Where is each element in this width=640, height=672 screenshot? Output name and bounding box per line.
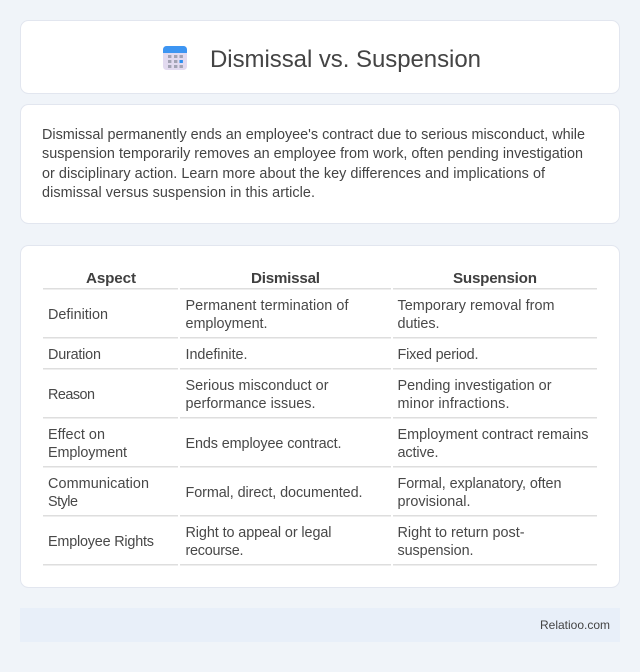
row: definition: Definition xyxy=(48,307,108,323)
table header xyxy=(86,270,537,287)
row: definition xyxy=(48,298,554,332)
row: reason: Reason xyxy=(48,387,95,403)
row: duration: Duration xyxy=(48,347,101,363)
intro paragraph xyxy=(42,127,585,201)
table header: Dismissal xyxy=(251,270,320,287)
row: employee rights: Right to appeal or legal xyxy=(186,525,332,541)
row: reason: minor infractions. xyxy=(398,396,510,412)
row: duration: Fixed period. xyxy=(398,347,478,363)
row: effect on employment: active. xyxy=(398,445,438,461)
row: employee rights: Employee Rights xyxy=(48,534,154,550)
intro paragraph: suspension temporarily removes an employee from work, often pending investigation xyxy=(42,146,583,162)
row: definition: duties. xyxy=(398,316,440,332)
row: communication style: Style xyxy=(48,494,78,510)
icon: calendar xyxy=(163,46,187,70)
row: employee rights: recourse. xyxy=(186,543,244,559)
title text: Dismissal vs. Suspension xyxy=(210,46,481,73)
row: employee rights xyxy=(48,525,525,559)
row: effect on employment: Employment contract remains xyxy=(398,427,588,443)
row: employee rights: Right to return post- xyxy=(398,525,525,541)
row: effect on employment xyxy=(48,427,588,461)
row: communication style: provisional. xyxy=(398,494,470,510)
panel: comparison table xyxy=(20,246,620,588)
row: effect on employment: Effect on xyxy=(48,427,105,443)
table header: Suspension xyxy=(453,270,537,287)
row: employee rights: suspension. xyxy=(398,543,474,559)
row: effect on employment: Ends employee contract. xyxy=(186,436,342,452)
intro paragraph: or disciplinary action. Learn more about the key differences and implications of xyxy=(42,166,546,182)
panel: intro xyxy=(20,104,620,224)
footer text: Relatioo.com xyxy=(540,618,610,632)
row: effect on employment: Employment xyxy=(48,445,127,461)
row: definition: Permanent termination of xyxy=(186,298,350,314)
row: definition: Temporary removal from xyxy=(398,298,554,314)
row: reason: Pending investigation or xyxy=(398,378,552,394)
row: reason: performance issues. xyxy=(186,396,316,412)
row: reason xyxy=(48,378,552,412)
row: reason: Serious misconduct or xyxy=(186,378,329,394)
footer xyxy=(20,608,620,642)
table rules xyxy=(43,288,597,566)
row: duration: Indefinite. xyxy=(186,347,248,363)
table header: Aspect xyxy=(86,270,136,287)
row: definition: employment. xyxy=(186,316,268,332)
row: duration xyxy=(48,347,478,363)
row: communication style xyxy=(48,476,562,510)
panel: title xyxy=(20,20,620,94)
intro paragraph: dismissal versus suspension in this article. xyxy=(42,185,315,201)
intro paragraph: Dismissal permanently ends an employee's contract due to serious misconduct, while xyxy=(42,127,585,143)
row: communication style: Communication xyxy=(48,476,149,492)
row: communication style: Formal, direct, documented. xyxy=(186,485,362,501)
row: communication style: Formal, explanatory, often xyxy=(398,476,562,492)
